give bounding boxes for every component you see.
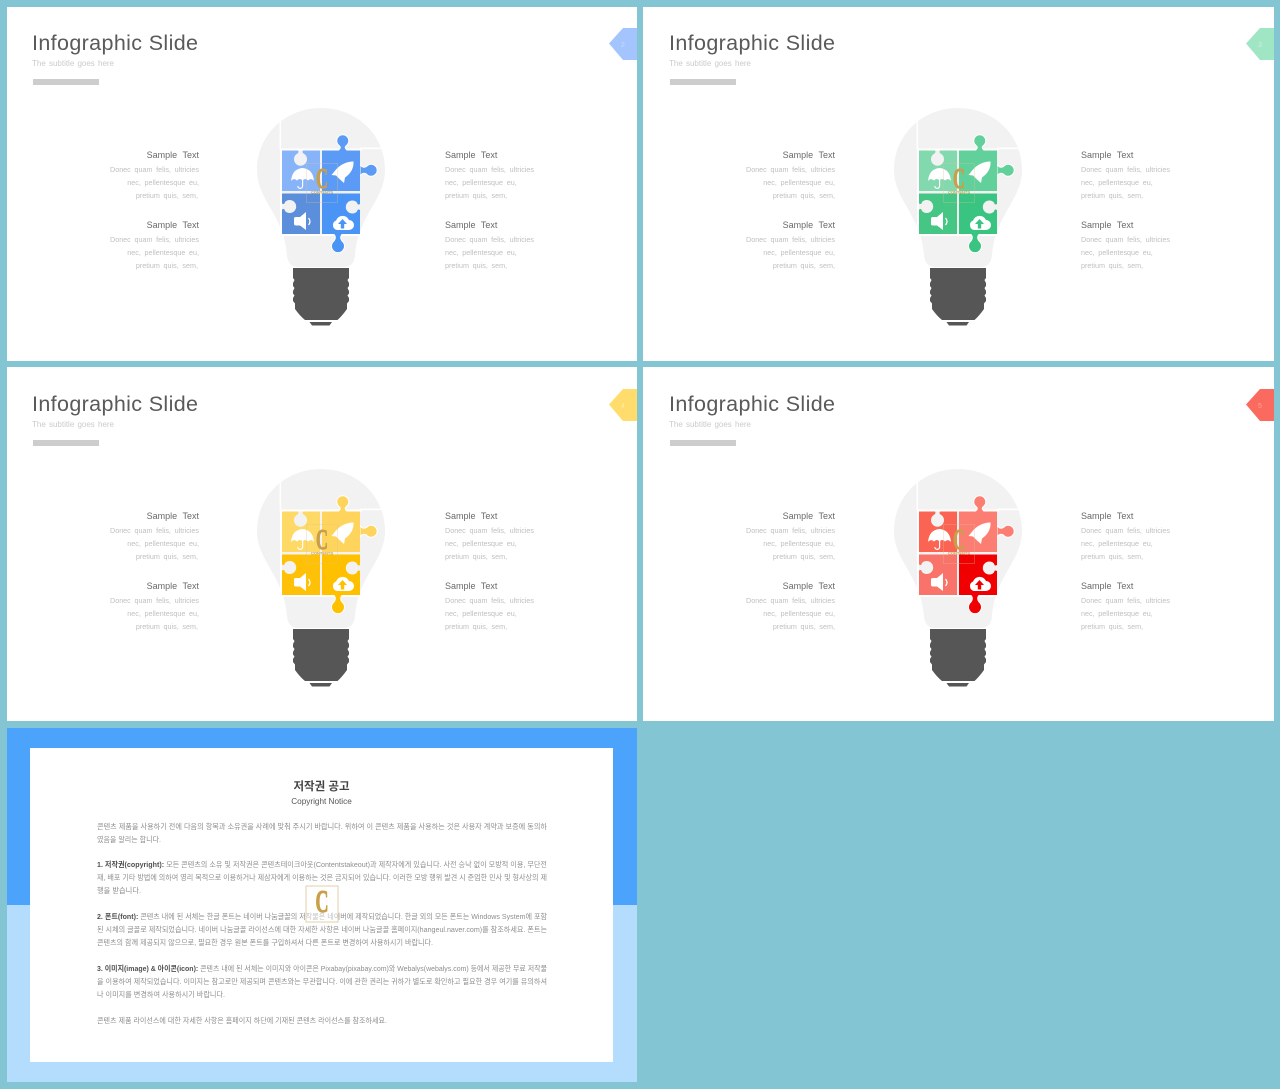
copyright body text: 행을 받습니다. [97, 885, 141, 895]
copyright body text: 콘텐츠 제품 라이선스에 대한 자세한 사항은 홈페이지 하단에 기재된 콘텐츠 라이선스를 참조하세요. [97, 1015, 387, 1025]
page tab [1246, 389, 1274, 421]
right text: bottom: pretium quis, sem, [1081, 622, 1143, 631]
subtitle: The subtitle goes here [669, 420, 752, 429]
left text: top: nec, pellentesque eu, [127, 539, 199, 548]
left text: bottom: nec, pellentesque eu, [127, 609, 199, 618]
right text: bottom [445, 581, 534, 631]
panel: copyright notice [7, 728, 637, 1082]
right text: top: Donec quam felis, ultricies [1081, 165, 1170, 174]
right text: bottom: nec, pellentesque eu, [1081, 609, 1153, 618]
subtitle: The subtitle goes here [669, 59, 752, 68]
right text: bottom: nec, pellentesque eu, [445, 248, 517, 257]
watermark [944, 524, 974, 564]
watermark: C [953, 163, 965, 195]
copyright body text: 된 시체의 글꼴로 제작되었습니다. 네이버 나눔글꼴 라이선스에 대한 자세한 사항은 네이버 나눔글꼴 홈페이지(hangeul.naver.com)를 참조하세요. 폰트는 [97, 924, 547, 934]
right text: bottom: Sample Text [1081, 220, 1134, 230]
right text: top: pretium quis, sem, [445, 552, 507, 561]
right text: bottom: pretium quis, sem, [445, 261, 507, 270]
left text: bottom: Donec quam felis, ultricies [110, 596, 199, 605]
watermark: CONTENTS [948, 550, 970, 556]
title underline bar [670, 79, 736, 85]
right text: bottom: Donec quam felis, ultricies [1081, 235, 1170, 244]
left text: bottom: nec, pellentesque eu, [127, 248, 199, 257]
left text: bottom: nec, pellentesque eu, [763, 609, 835, 618]
copyright body text: 였음을 알리는 합니다. [97, 834, 161, 844]
watermark [944, 163, 974, 202]
watermark: CONTENTS [311, 550, 333, 556]
left text: bottom: Sample Text [783, 581, 835, 591]
left text: bottom: Sample Text [783, 220, 835, 230]
copyright body text [97, 821, 547, 1025]
watermark: C [316, 163, 328, 195]
left text: top: Sample Text [783, 150, 835, 160]
left text: bottom: nec, pellentesque eu, [763, 248, 835, 257]
title: Infographic Slide [669, 31, 835, 55]
title underline bar [33, 79, 99, 85]
left text: top: nec, pellentesque eu, [127, 178, 199, 187]
left text: top [746, 150, 835, 200]
right text: bottom: Sample Text [445, 220, 498, 230]
left text: bottom: pretium quis, sem, [773, 261, 835, 270]
left text: top [110, 150, 199, 200]
left text: top: Donec quam felis, ultricies [746, 526, 835, 535]
right text: bottom: Sample Text [1081, 581, 1134, 591]
left text: top: Sample Text [147, 511, 199, 521]
right text: bottom: Sample Text [445, 581, 498, 591]
left text: top [746, 511, 835, 561]
right text: bottom: pretium quis, sem, [1081, 261, 1143, 270]
copyright heading: 저작권 공고 [293, 779, 350, 793]
right text: bottom: nec, pellentesque eu, [1081, 248, 1153, 257]
right text: bottom: Donec quam felis, ultricies [445, 235, 534, 244]
page tab: 3 [1258, 42, 1262, 49]
left text: top: Sample Text [147, 150, 199, 160]
light bulb with puzzle [894, 108, 1023, 326]
watermark: C [953, 524, 965, 556]
page tab: 2 [621, 42, 625, 49]
left text: bottom [110, 581, 199, 631]
light bulb with puzzle [257, 108, 386, 326]
left text: top: pretium quis, sem, [136, 191, 198, 200]
left text: top: pretium quis, sem, [136, 552, 198, 561]
right text: top [445, 511, 534, 561]
right text: top [445, 150, 534, 200]
panel: red slide [643, 367, 1274, 721]
copyright body text: 2. 폰트(font): 콘텐츠 내에 된 서체는 한글 폰트는 네이버 나눔글꼴의 저작물은 네이버에 제작되었습니다. 한글 외의 모든 폰트는 Windows System에 포함 [97, 911, 547, 921]
watermark: C [316, 883, 328, 919]
copyright body text: 1. 저작권(copyright): 모든 콘텐츠의 소유 및 저작권은 콘텐츠테이크아웃(Contentstakeout)과 제작자에게 있습니다. 사전 승낙 없이 모방적 이용, 무단전 [97, 859, 547, 869]
left text: top [110, 511, 199, 561]
copyright body text: 콘텐츠 제품을 사용하기 전에 다음의 항목과 소유권을 사례에 맞춰 주시기 바랍니다. 위하여 이 콘텐츠 제품을 사용하는 것은 사용자 계약과 보증에 동의하 [97, 821, 547, 831]
title: Infographic Slide [32, 31, 198, 55]
subtitle: The subtitle goes here [32, 59, 115, 68]
light bulb with puzzle [894, 469, 1023, 686]
title underline bar [670, 440, 736, 446]
left text: bottom: Donec quam felis, ultricies [110, 235, 199, 244]
right text: top: Sample Text [445, 511, 498, 521]
right text: bottom [445, 220, 534, 270]
right text: top: Sample Text [1081, 511, 1134, 521]
page tab: 5 [1258, 403, 1262, 410]
right text: top: pretium quis, sem, [1081, 191, 1143, 200]
right text: top: pretium quis, sem, [1081, 552, 1143, 561]
right text: top: Donec quam felis, ultricies [445, 526, 534, 535]
left text: bottom: Donec quam felis, ultricies [746, 596, 835, 605]
right text: bottom [1081, 220, 1170, 270]
page tab [1246, 28, 1274, 60]
left text: bottom: Donec quam felis, ultricies [746, 235, 835, 244]
watermark [306, 163, 338, 202]
title: Infographic Slide [32, 392, 198, 416]
watermark: CONTENTS [311, 190, 333, 194]
right text: top [1081, 511, 1170, 561]
panel: green slide [643, 7, 1274, 361]
copyright body text: 나 이미지를 변경하여 사용하시기 바랍니다. [97, 989, 225, 999]
panel: yellow slide [7, 367, 637, 721]
title: Infographic Slide [669, 392, 835, 416]
left text: top: nec, pellentesque eu, [763, 178, 835, 187]
right text: bottom: pretium quis, sem, [445, 622, 507, 631]
subtitle: The subtitle goes here [32, 420, 115, 429]
left text: top: Donec quam felis, ultricies [110, 165, 199, 174]
watermark: C [316, 524, 328, 556]
right text: bottom [1081, 581, 1170, 631]
title underline bar [33, 440, 99, 446]
copyright body text: 3. 이미지(image) & 아이콘(icon): 콘텐츠 내에 된 서체는 이미지와 아이콘은 Pixabay(pixabay.com)와 Webalys(webalys.com) 등에서 제공한 무료 저작물 [97, 963, 547, 973]
right text: bottom: Donec quam felis, ultricies [1081, 596, 1170, 605]
right text: top: nec, pellentesque eu, [1081, 178, 1153, 187]
left text: bottom [746, 220, 835, 270]
right text: top: Sample Text [445, 150, 498, 160]
right text: top: Donec quam felis, ultricies [445, 165, 534, 174]
left text: bottom: Sample Text [147, 220, 199, 230]
left text: bottom: pretium quis, sem, [136, 261, 198, 270]
left text: top: pretium quis, sem, [773, 552, 835, 561]
copyright body text: 재, 배포 기타 방법에 의하여 영리 목적으로 이용하거나 제삼자에게 이용하는 것은 금지되어 있습니다. 이러한 모방 행위 발견 시 준엄한 민사 및 형사상의 제 [97, 872, 547, 882]
right text: bottom: Donec quam felis, ultricies [445, 596, 534, 605]
left text: top: nec, pellentesque eu, [763, 539, 835, 548]
left text: top: pretium quis, sem, [773, 191, 835, 200]
left text: top: Sample Text [783, 511, 835, 521]
watermark [306, 524, 338, 564]
right text: top: nec, pellentesque eu, [445, 539, 517, 548]
left text: bottom: pretium quis, sem, [136, 622, 198, 631]
left text: bottom [746, 581, 835, 631]
left text: top: Donec quam felis, ultricies [110, 526, 199, 535]
copyright body text: 콘텐츠의 함께 제공되지 않으므로, 필요한 경우 원본 폰트를 구입하셔서 다른 폰트로 변경하여 사용하시기 바랍니다. [97, 937, 433, 947]
right text: top: Donec quam felis, ultricies [1081, 526, 1170, 535]
page tab: 4 [621, 403, 625, 410]
right text: top: nec, pellentesque eu, [1081, 539, 1153, 548]
right text: bottom: nec, pellentesque eu, [445, 609, 517, 618]
panel: blue slide [7, 7, 637, 361]
left text: bottom [110, 220, 199, 270]
right text: top: pretium quis, sem, [445, 191, 507, 200]
watermark [306, 883, 338, 922]
page tab [609, 28, 637, 60]
copyright subheading: Copyright Notice [291, 797, 352, 806]
left text: bottom: pretium quis, sem, [773, 622, 835, 631]
left text: top: Donec quam felis, ultricies [746, 165, 835, 174]
right text: top [1081, 150, 1170, 200]
right text: top: nec, pellentesque eu, [445, 178, 517, 187]
page tab [609, 389, 637, 421]
light bulb with puzzle [257, 469, 386, 686]
left text: bottom: Sample Text [147, 581, 199, 591]
copyright body text: 을 이용하여 제작되었습니다. 이미지는 참고로만 제공되며 콘텐츠와는 무관합니다. 이에 관한 권리는 귀하가 별도로 확인하고 필요한 경우 여기를 유의하셔 [97, 976, 547, 986]
watermark: CONTENTS [948, 190, 970, 194]
right text: top: Sample Text [1081, 150, 1134, 160]
